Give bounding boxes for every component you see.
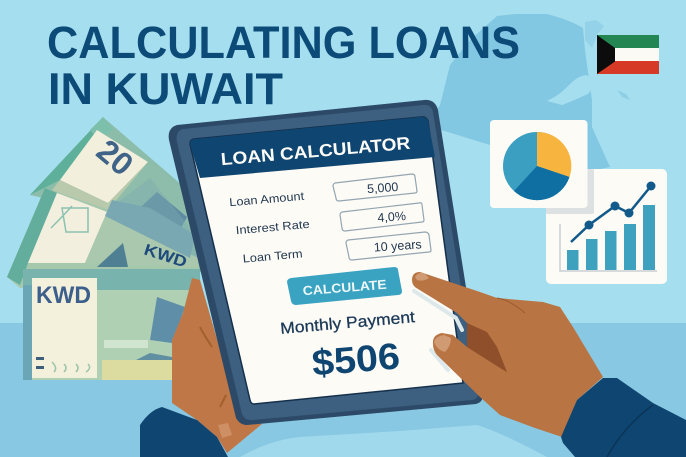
input: loan amount: 5,000 <box>367 180 399 196</box>
input: interest rate <box>340 203 424 231</box>
axes <box>560 224 657 271</box>
hand: holding left <box>172 278 262 453</box>
screen header <box>190 117 435 178</box>
input: interest rate: 4,0% <box>377 209 406 225</box>
form labels <box>229 191 310 266</box>
payment amount: $506 <box>310 335 402 384</box>
input: loan amount <box>333 174 417 201</box>
calculate button: CALCULATE <box>302 277 387 298</box>
bars <box>567 205 655 270</box>
banknote: front: KWD <box>36 282 91 309</box>
finger shadow <box>414 291 462 370</box>
title: IN KUWAIT <box>48 65 283 114</box>
tablet screen <box>190 117 463 404</box>
tablet <box>169 100 483 425</box>
banknote: middle <box>7 188 200 288</box>
banknote: 20: 20 <box>90 132 140 183</box>
form labels: Interest Rate <box>235 219 310 237</box>
pie chart card <box>490 120 588 208</box>
banknote: 20 <box>30 117 205 275</box>
form labels: Loan Term <box>242 248 303 266</box>
banknote: front <box>23 269 200 380</box>
calculate button <box>287 267 402 305</box>
hand: pointing right <box>412 272 603 437</box>
trend line <box>571 182 656 242</box>
sleeve: right <box>561 378 686 457</box>
title <box>47 17 520 114</box>
bar and line chart card <box>546 169 667 284</box>
banknotes <box>7 117 205 380</box>
title: CALCULATING LOANS <box>47 17 520 68</box>
form labels: Loan Amount <box>229 191 306 209</box>
icon: Kuwait flag <box>597 35 659 74</box>
monthly payment label: Monthly Payment <box>280 309 416 338</box>
header text: LOAN CALCULATOR <box>220 133 411 169</box>
pie chart <box>503 132 571 200</box>
sleeve: left <box>140 407 228 457</box>
banknote: middle: KWD <box>142 242 189 271</box>
input: loan term: 10 years <box>373 237 422 255</box>
input: loan term <box>346 232 431 260</box>
